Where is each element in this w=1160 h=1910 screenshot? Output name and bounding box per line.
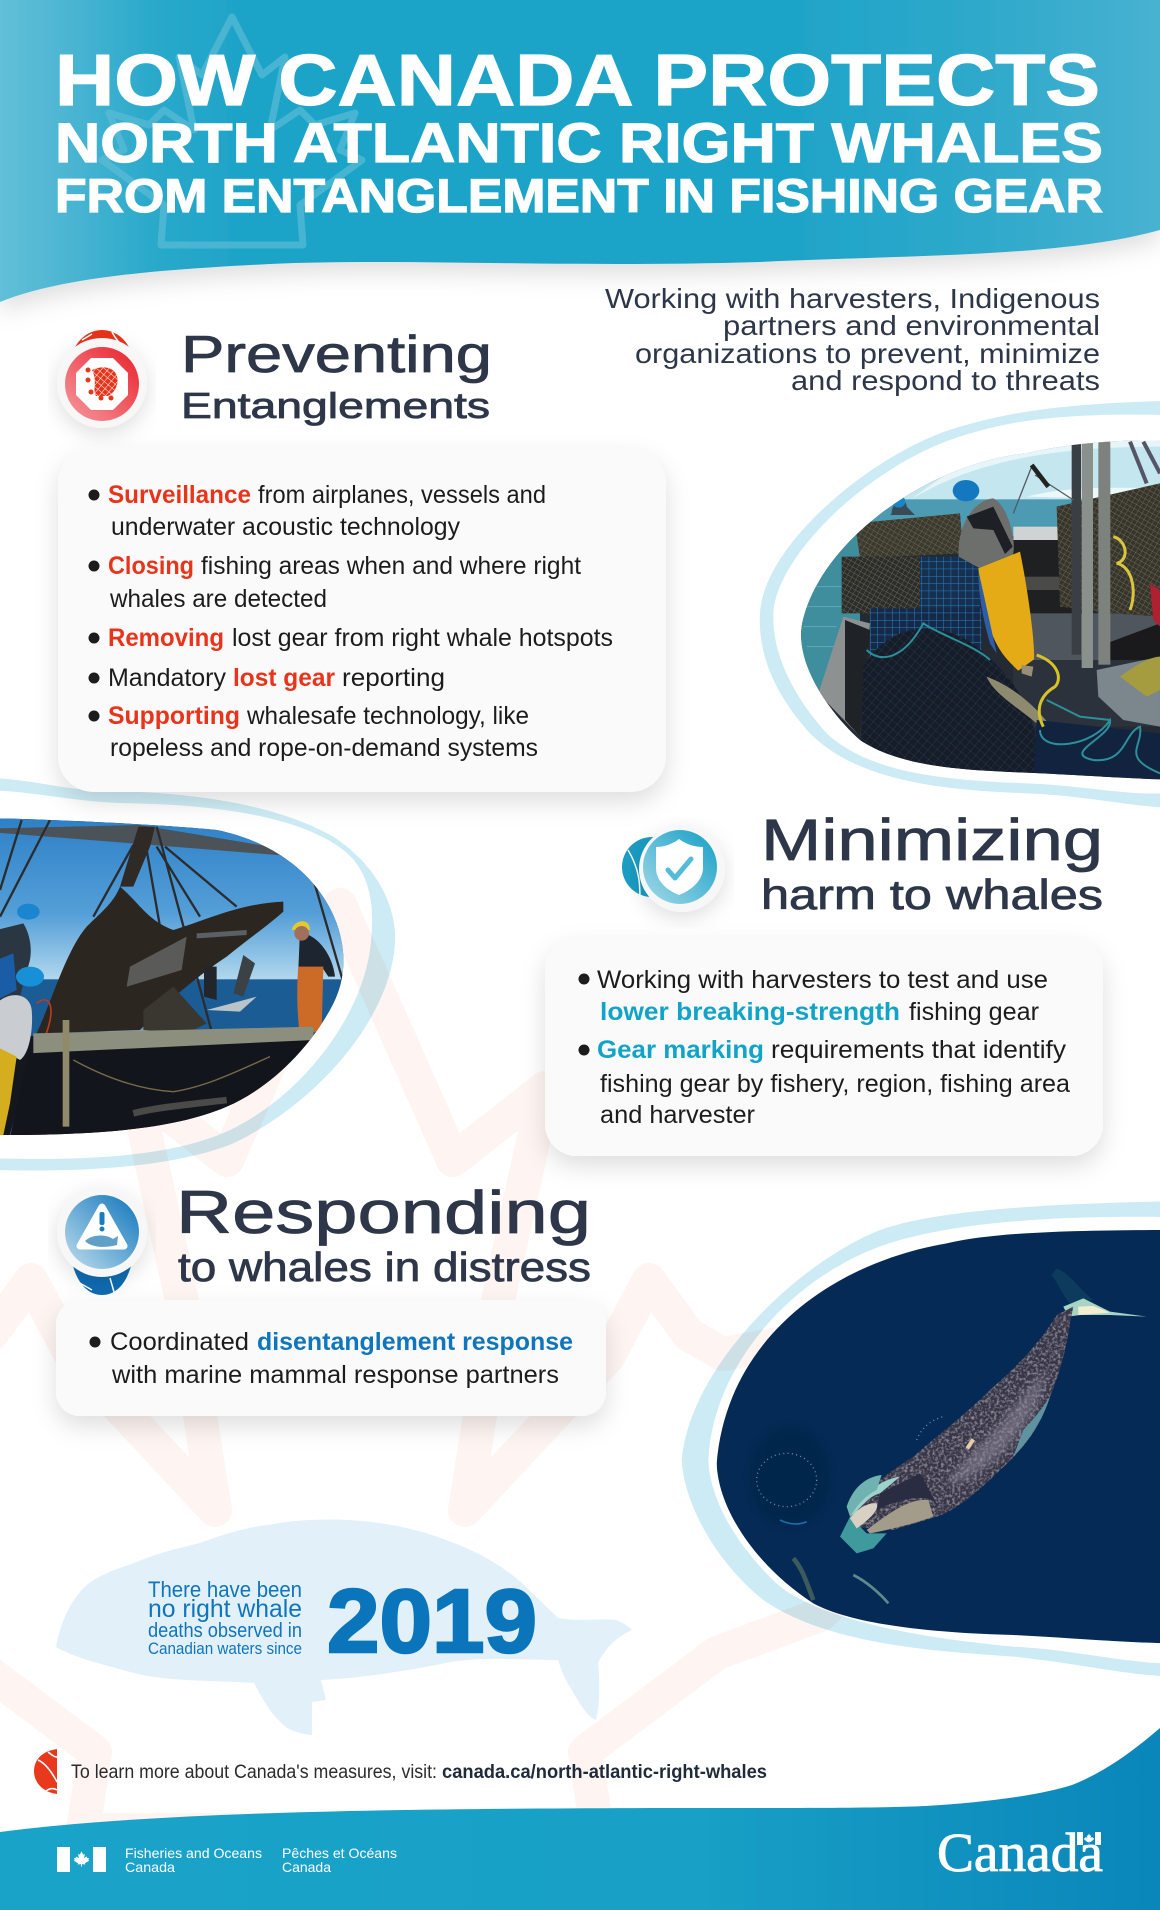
footer link text: To learn more about Canada's measures, visit: — [71, 1762, 437, 1783]
card: minimizing measures — [545, 938, 1103, 1156]
photo: ghost net hauled aboard — [0, 813, 350, 1147]
bullet list: preventing: ropeless and rope-on-demand systems — [110, 734, 538, 762]
bullet list: minimizing: and harvester — [600, 1101, 755, 1129]
photo: harvesters on boat — [793, 433, 1160, 787]
intro text: Working with harvesters, Indigenous — [605, 283, 1100, 314]
photo ring: middle left — [0, 778, 395, 1170]
card: responding measures — [56, 1300, 606, 1416]
heading: preventing entanglements: Preventing — [181, 326, 492, 384]
header maple leaf — [102, 17, 362, 245]
bullet list: preventing: whalesafe technology, like — [246, 702, 529, 730]
bullet list: minimizing: requirements that identify — [771, 1036, 1067, 1064]
heading: responding to whales in distress: Responding — [176, 1179, 591, 1246]
stat text: deaths since — [148, 1577, 302, 1658]
footer link text — [71, 1762, 767, 1783]
bullet list: preventing: Supporting — [108, 702, 240, 730]
photo: right whale from above — [710, 1227, 1160, 1647]
bullet list: preventing — [88, 481, 613, 762]
bullet list: minimizing: fishing gear by fishery, region, fishing area — [600, 1070, 1070, 1098]
bullet list: preventing: Surveillance — [108, 481, 251, 509]
bullet list: preventing: fishing areas when and where right — [201, 552, 581, 580]
footer link icon — [34, 1749, 57, 1794]
bullet list: preventing: underwater acoustic technology — [111, 513, 460, 541]
bullet list: preventing: from airplanes, vessels and — [258, 481, 546, 509]
title — [55, 41, 1103, 222]
bullet list: minimizing: fishing gear — [909, 998, 1039, 1026]
heading: preventing entanglements: Entanglements — [181, 385, 490, 426]
department signature: Fisheries and Oceans — [125, 1845, 262, 1861]
bullet list: responding: Coordinated — [110, 1328, 249, 1356]
department signature — [125, 1845, 397, 1875]
intro text: organizations to prevent, minimize — [635, 338, 1100, 369]
bullet list: preventing: whales are detected — [109, 585, 327, 613]
stat number: 2019: 2019 — [327, 1572, 537, 1672]
background maple leaf outline — [0, 905, 1010, 1830]
bullet list: minimizing — [578, 966, 1070, 1129]
heading: minimizing harm to whales: Minimizing — [761, 808, 1103, 873]
bullet list: preventing: reporting — [342, 664, 445, 692]
bullet list: preventing: lost gear — [233, 664, 335, 692]
bullet list: minimizing: Gear marking — [597, 1036, 764, 1064]
whale silhouette — [56, 1520, 632, 1735]
intro text: partners and environmental — [723, 310, 1100, 341]
card: preventing measures — [58, 448, 666, 792]
stat text: deaths since: Canadian waters since — [148, 1639, 302, 1658]
department signature: Canada — [282, 1859, 331, 1875]
bullet list: preventing: Removing — [108, 624, 224, 652]
bullet list: responding: disentanglement response — [257, 1328, 573, 1356]
heading: minimizing harm to whales — [761, 808, 1103, 918]
title: HOW CANADA PROTECTS — [55, 41, 1100, 121]
heading: preventing entanglements — [181, 326, 492, 426]
icon: preventing net — [57, 330, 147, 428]
icon: responding warning — [57, 1187, 147, 1295]
bullet list: preventing: Mandatory — [108, 664, 226, 692]
footer wave — [0, 1728, 1160, 1910]
bullet list: minimizing: Working with harvesters to test and use — [597, 966, 1048, 994]
icon: minimizing shield — [622, 826, 725, 912]
stat text: deaths since: deaths observed in — [148, 1620, 302, 1642]
bullet list: responding: with marine mammal response partners — [111, 1361, 559, 1389]
photo ring: lower right — [682, 1201, 1160, 1677]
heading: minimizing harm to whales: harm to whales — [761, 871, 1103, 918]
photo ring: top right — [760, 401, 1160, 807]
title: FROM ENTANGLEMENT IN FISHING GEAR — [55, 169, 1103, 222]
bullet list: minimizing: lower breaking-strength — [600, 998, 900, 1026]
stat text: deaths since: no right whale — [148, 1595, 302, 1623]
canada wordmark: Canada — [937, 1822, 1103, 1883]
bullet list: preventing: lost gear from right whale hotspots — [232, 624, 613, 652]
footer link text: canada.ca/north-atlantic-right-whales — [442, 1762, 767, 1783]
bullet list: preventing: Closing — [108, 552, 194, 580]
header wave — [0, 0, 1160, 302]
department signature: Pêches et Océans — [282, 1845, 397, 1861]
intro text: and respond to threats — [791, 365, 1100, 396]
government flag symbol — [57, 1847, 106, 1872]
intro text — [605, 283, 1100, 396]
heading: responding to whales in distress — [176, 1179, 591, 1290]
stat text: deaths since: There have been — [148, 1577, 302, 1602]
bullet list: responding — [90, 1328, 573, 1389]
department signature: Canada — [125, 1859, 175, 1875]
title: NORTH ATLANTIC RIGHT WHALES — [55, 111, 1103, 174]
heading: responding to whales in distress: to whales in distress — [178, 1244, 591, 1290]
